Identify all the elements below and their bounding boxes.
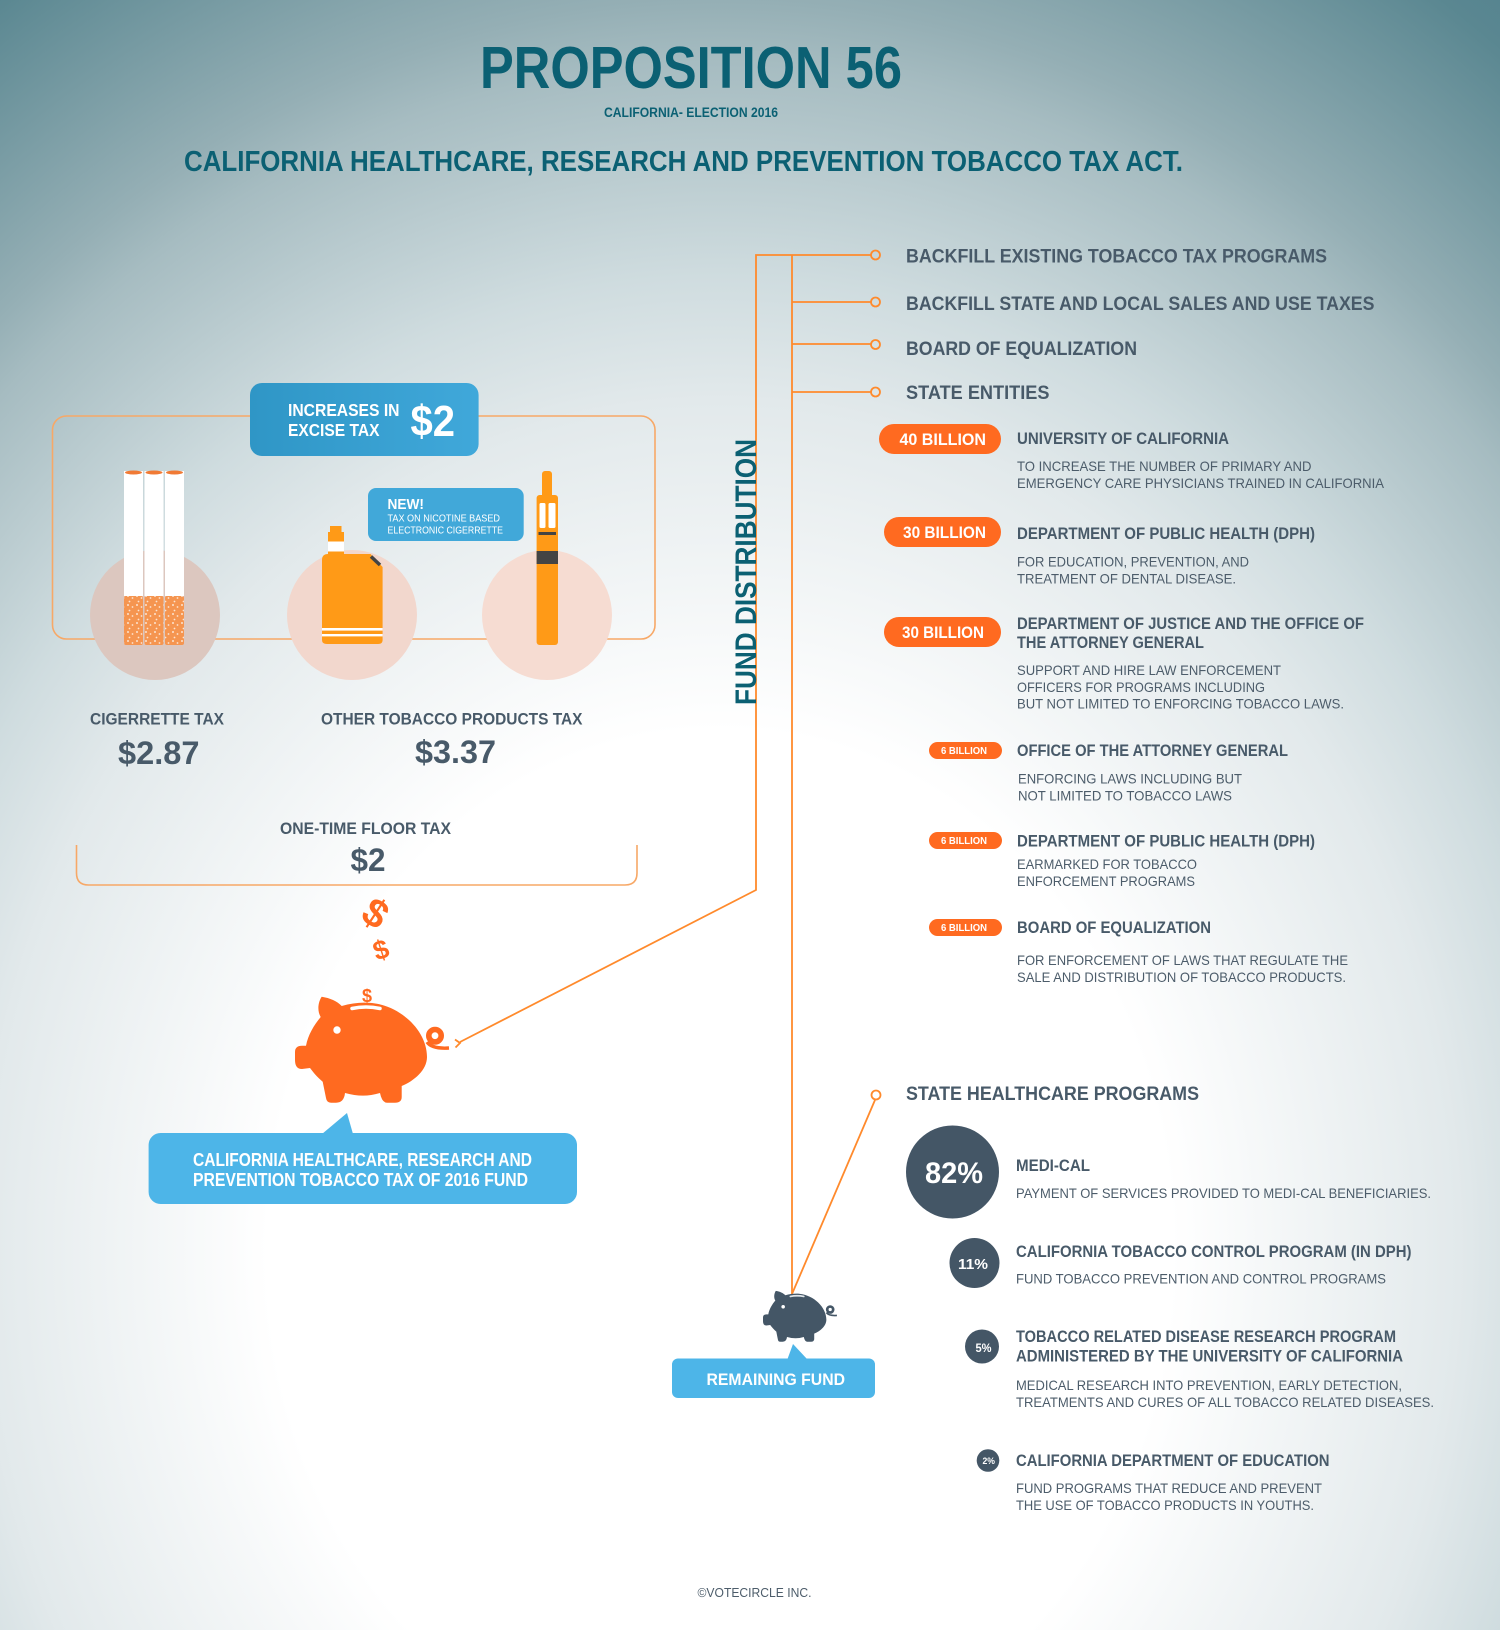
cigarette tax label: CIGERRETTE TAX [90,710,224,728]
program: California Tobacco Control [950,1238,1412,1288]
entity: Office of the Attorney General: 6 BILLION [941,746,987,757]
excise tax callout [250,383,479,456]
new tax callout: ELECTRONIC CIGERRETTE [388,526,503,536]
entity: Department of Public Health: DEPARTMENT OF PUBLIC HEALTH (DPH) [1017,525,1315,543]
entity: Department of Justice: 30 BILLION [902,623,984,642]
entity: DPH enforcement: ENFORCEMENT PROGRAMS [1017,873,1195,889]
title: PROPOSITION 56 [480,35,902,101]
distribution list headings: BACKFILL EXISTING TOBACCO TAX PROGRAMS [906,246,1327,268]
callout: fund name: PREVENTION TOBACCO TAX OF 2016 FUND [193,1170,528,1190]
entity: Board of Equalization: SALE AND DISTRIBUTION OF TOBACCO PRODUCTS. [1017,969,1346,985]
program: Department of Education: THE USE OF TOBACCO PRODUCTS IN YOUTHS. [1016,1497,1314,1513]
one-time floor tax label [280,820,451,878]
program: Tobacco Related Disease Research [965,1328,1434,1410]
icon: falling dollar signs: $ [354,889,396,938]
entity: University of California: 40 BILLION [900,430,986,449]
program: Tobacco Related Disease Research: TREATMENTS AND CURES OF ALL TOBACCO RELATED DISEASES. [1016,1394,1434,1410]
entity: Office of the Attorney General: ENFORCING LAWS INCLUDING BUT [1018,770,1242,786]
entity: Department of Public Health: 30 BILLION [903,523,986,542]
other tobacco products label [321,710,582,770]
program: Tobacco Related Disease Research: TOBACCO RELATED DISEASE RESEARCH PROGRAM [1016,1328,1396,1346]
excise tax callout: INCREASES IN [288,400,400,420]
cigarette tax label: $2.87 [118,735,200,771]
entity: DPH enforcement: 6 BILLION [941,836,987,847]
circle: cigarette backdrop [90,550,220,680]
entity: Office of the Attorney General [929,742,1288,804]
one-time floor tax label: $2 [350,842,386,878]
entity: Office of the Attorney General: NOT LIMITED TO TOBACCO LAWS [1018,788,1232,804]
new tax callout [368,488,524,541]
callout: remaining fund: REMAINING FUND [706,1370,845,1389]
excise tax callout: $2 [410,397,455,446]
callout: fund name [149,1113,577,1204]
entity: Department of Justice: THE ATTORNEY GENERAL [1017,634,1204,652]
program: Medi-Cal: MEDI-CAL [1016,1157,1090,1175]
entity: Department of Justice: OFFICERS FOR PROGRAMS INCLUDING [1017,679,1265,695]
icon: cigarettes [124,470,184,645]
entity: Department of Public Health [884,517,1315,586]
footer credit: ©VOTECIRCLE INC. [698,1585,812,1600]
entity: Department of Justice: DEPARTMENT OF JUSTICE AND THE OFFICE OF [1017,615,1364,633]
entity: Department of Justice: BUT NOT LIMITED TO ENFORCING TOBACCO LAWS. [1017,696,1344,712]
floor tax bracket [76,845,637,885]
entity: Board of Equalization: BOARD OF EQUALIZATION [1017,919,1211,937]
new tax callout: NEW! [388,496,424,513]
entity: University of California [879,424,1385,491]
entity: DPH enforcement: EARMARKED FOR TOBACCO [1017,856,1197,872]
panel: excise tax increase [52,383,655,680]
icon: tobacco bottle [322,526,383,644]
entity: Department of Public Health: FOR EDUCATION, PREVENTION, AND [1017,554,1249,570]
callout: fund name: CALIFORNIA HEALTHCARE, RESEARCH AND [193,1150,532,1170]
distribution list headings: STATE ENTITIES [906,382,1050,404]
cigarette tax label [90,710,224,771]
entity: University of California: TO INCREASE THE NUMBER OF PRIMARY AND [1017,458,1312,474]
program: Department of Education: CALIFORNIA DEPARTMENT OF EDUCATION [1016,1452,1330,1470]
program: Medi-Cal [906,1126,1431,1218]
entity: Department of Public Health: TREATMENT OF DENTAL DISEASE. [1017,570,1236,586]
program: Department of Education [977,1449,1330,1513]
fund distribution label: FUND DISTRIBUTION [730,439,763,705]
entity: Office of the Attorney General: OFFICE OF THE ATTORNEY GENERAL [1017,742,1288,760]
distribution list headings [906,246,1374,404]
entity: DPH enforcement [929,832,1315,889]
program: California Tobacco Control: 11% [958,1256,988,1273]
icon: falling dollar signs [354,889,396,967]
program: Tobacco Related Disease Research: 5% [976,1341,992,1355]
program: Medi-Cal: 82% [925,1157,983,1190]
panel outline [52,416,655,639]
icon: falling dollar signs: $ [369,933,393,967]
distribution list headings: BOARD OF EQUALIZATION [906,338,1137,360]
entity: DPH enforcement: DEPARTMENT OF PUBLIC HEALTH (DPH) [1017,832,1315,850]
title block [184,35,1183,178]
icon: e-cigarette [537,471,558,645]
icon: dark piggy bank [763,1291,837,1342]
entity: Board of Equalization [929,919,1348,985]
program: California Tobacco Control: CALIFORNIA TOBACCO CONTROL PROGRAM (IN DPH) [1016,1243,1412,1261]
distribution list headings: BACKFILL STATE AND LOCAL SALES AND USE TAXES [906,293,1374,315]
circle: e-cigarette backdrop [482,550,612,680]
entity: Board of Equalization: FOR ENFORCEMENT OF LAWS THAT REGULATE THE [1017,952,1348,968]
entity: Department of Justice: SUPPORT AND HIRE LAW ENFORCEMENT [1017,662,1281,678]
entity: University of California: UNIVERSITY OF CALIFORNIA [1017,430,1229,448]
other tobacco products label: $3.37 [415,734,496,770]
callout: remaining fund [672,1344,875,1398]
circle: tobacco bottle backdrop [287,550,417,680]
program: Department of Education: FUND PROGRAMS THAT REDUCE AND PREVENT [1016,1480,1322,1496]
heading: CALIFORNIA HEALTHCARE, RESEARCH AND PREVENTION TOBACCO TAX ACT. [184,146,1183,178]
icon: orange piggy bank: $ [362,986,372,1006]
entity: Board of Equalization: 6 BILLION [941,923,987,934]
one-time floor tax label: ONE-TIME FLOOR TAX [280,820,451,838]
excise tax callout: EXCISE TAX [288,420,380,440]
program: Medi-Cal: PAYMENT OF SERVICES PROVIDED TO MEDI-CAL BENEFICIARIES. [1016,1185,1431,1201]
connector lines: fund distribution [455,250,880,1294]
state healthcare programs heading: STATE HEALTHCARE PROGRAMS [906,1083,1199,1105]
other tobacco products label: OTHER TOBACCO PRODUCTS TAX [321,710,582,728]
icon: orange piggy bank [295,986,449,1103]
entity: Department of Justice [884,615,1364,712]
program: Tobacco Related Disease Research: MEDICAL RESEARCH INTO PREVENTION, EARLY DETECTION, [1016,1377,1402,1393]
entity: University of California: EMERGENCY CARE PHYSICIANS TRAINED IN CALIFORNIA [1017,475,1385,491]
program: California Tobacco Control: FUND TOBACCO PREVENTION AND CONTROL PROGRAMS [1016,1270,1386,1286]
new tax callout: TAX ON NICOTINE BASED [388,514,500,525]
program: Department of Education: 2% [982,1456,995,1466]
program: Tobacco Related Disease Research: ADMINISTERED BY THE UNIVERSITY OF CALIFORNIA [1016,1348,1403,1366]
subtitle: CALIFORNIA- ELECTION 2016 [604,105,778,120]
